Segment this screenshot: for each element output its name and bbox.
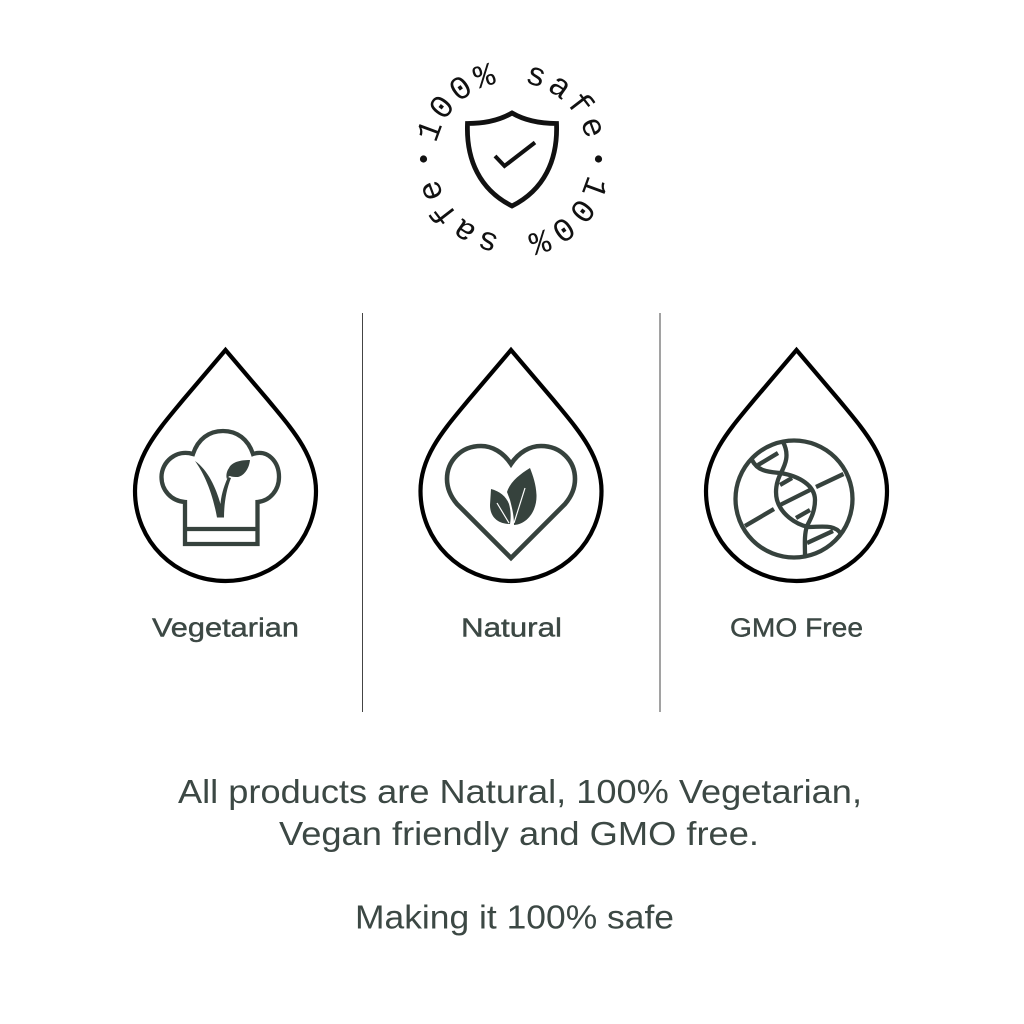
panel: Natural xyxy=(420,350,602,642)
divider: left xyxy=(362,313,364,712)
icon: heart with leaves xyxy=(447,446,575,558)
divider: right xyxy=(659,313,661,712)
separator dot: right xyxy=(595,155,602,163)
icon: shield with check mark xyxy=(467,113,557,206)
drop outline: Vegetarian xyxy=(135,350,316,581)
circular text: upper 100% safe: 100% safe xyxy=(418,62,601,141)
text line 2: Vegan friendly and GMO free. xyxy=(279,815,759,852)
label: Natural: Natural xyxy=(461,614,562,642)
text line 3: Making it 100% safe xyxy=(355,898,674,936)
panel: Vegetarian xyxy=(135,350,316,642)
icon: chef hat with V leaf xyxy=(162,431,279,544)
label: Vegetarian: Vegetarian xyxy=(152,614,299,642)
text block: summary xyxy=(178,773,862,936)
drop outline: Natural xyxy=(420,350,602,581)
text line 1: All products are Natural, 100% Vegetarian, xyxy=(178,773,862,810)
panel: GMO Free xyxy=(706,350,887,642)
badge: 100% safe stamp xyxy=(418,62,606,256)
circular text: lower 100% safe: 100% safe xyxy=(423,177,606,256)
drop outline: GMO Free xyxy=(706,350,887,581)
separator dot: left xyxy=(420,155,427,163)
label: GMO Free: GMO Free xyxy=(730,614,863,642)
icon: DNA prohibited xyxy=(736,440,852,558)
